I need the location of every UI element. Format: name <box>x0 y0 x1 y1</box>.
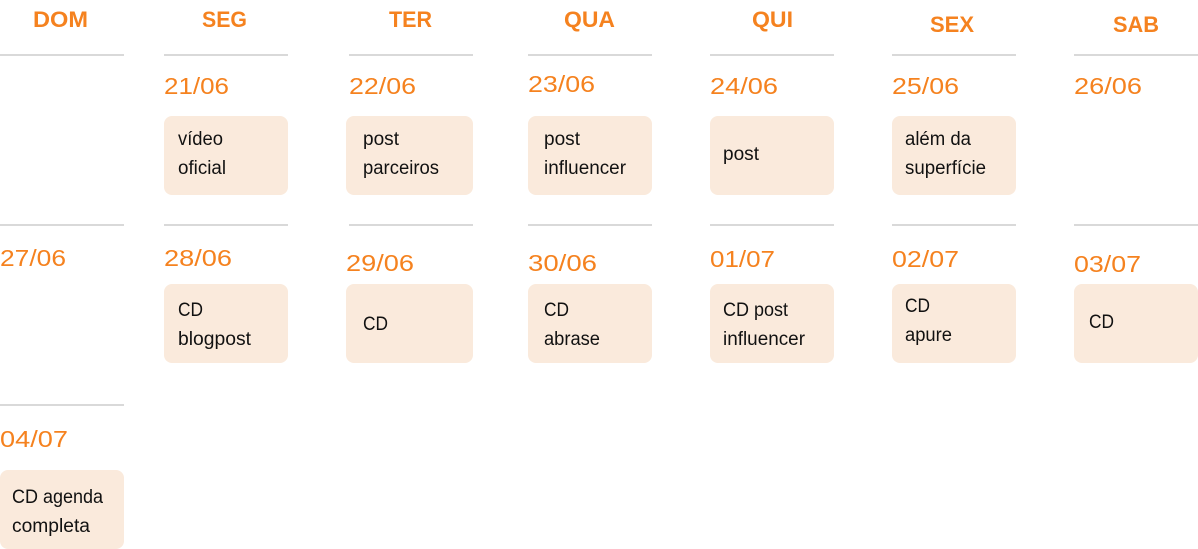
day: 25/06: superfície <box>905 158 986 179</box>
day: 04/07 <box>0 426 124 549</box>
day: 28/06: CD <box>178 300 203 321</box>
day: 23/06: 23/06 <box>528 71 595 97</box>
day: 25/06: além da <box>905 129 971 150</box>
day: 01/07: 01/07 <box>710 246 775 272</box>
day: 22/06: 22/06 <box>349 73 416 99</box>
weekday headings: DOM <box>33 7 88 32</box>
day: 22/06 <box>346 73 473 195</box>
day: 23/06: influencer <box>544 158 627 179</box>
day: 02/07: 02/07 <box>892 246 959 272</box>
day: 24/06 <box>710 73 834 195</box>
day: 30/06: abrase <box>544 329 600 350</box>
weekday headings: TER <box>389 7 432 32</box>
day: 02/07: CD <box>905 296 930 317</box>
day: 21/06: vídeo <box>178 129 223 150</box>
day: 02/07: apure <box>905 325 952 346</box>
day: 23/06 <box>528 71 652 195</box>
weekday headings: SEG <box>202 7 247 32</box>
day: 03/07: 03/07 <box>1074 251 1141 277</box>
weekday headings: SEX <box>930 12 974 37</box>
day: 29/06 <box>346 250 473 363</box>
day: 01/07: influencer <box>723 329 806 350</box>
weekday headings: SAB <box>1113 12 1159 37</box>
day: 24/06: 24/06 <box>710 73 778 99</box>
day: 22/06: parceiros <box>363 158 439 179</box>
day: 02/07 <box>892 246 1016 363</box>
day: 30/06: CD <box>544 300 569 321</box>
day: 29/06: 29/06 <box>346 250 414 276</box>
day: 04/07: 04/07 <box>0 426 68 452</box>
day: 01/07: CD post <box>723 300 789 321</box>
day: 30/06 <box>528 250 652 363</box>
weekday headings <box>33 7 1159 37</box>
day: 21/06: oficial <box>178 158 226 179</box>
day: 30/06: 30/06 <box>528 250 597 276</box>
day: 27/06: 27/06 <box>0 245 66 271</box>
day: 28/06 <box>164 245 288 363</box>
day: 01/07 <box>710 246 834 363</box>
day: 04/07: CD agenda <box>12 487 103 508</box>
day: 29/06: CD <box>363 314 388 335</box>
weekday headings: QUA <box>564 7 615 32</box>
weekday headings: QUI <box>752 7 793 32</box>
day: 28/06: blogpost <box>178 329 252 350</box>
day: 25/06: 25/06 <box>892 73 959 99</box>
day: 04/07: completa <box>12 516 90 537</box>
day: 24/06: post <box>723 144 760 165</box>
day: 28/06: 28/06 <box>164 245 232 271</box>
day: 25/06 <box>892 73 1016 195</box>
day: 03/07: CD <box>1089 312 1114 333</box>
day: 23/06: post <box>544 129 581 150</box>
day: 21/06: 21/06 <box>164 73 229 99</box>
day: 26/06: 26/06 <box>1074 73 1142 99</box>
day: 03/07 <box>1074 251 1198 363</box>
day: 21/06 <box>164 73 288 195</box>
day: 22/06: post <box>363 129 400 150</box>
